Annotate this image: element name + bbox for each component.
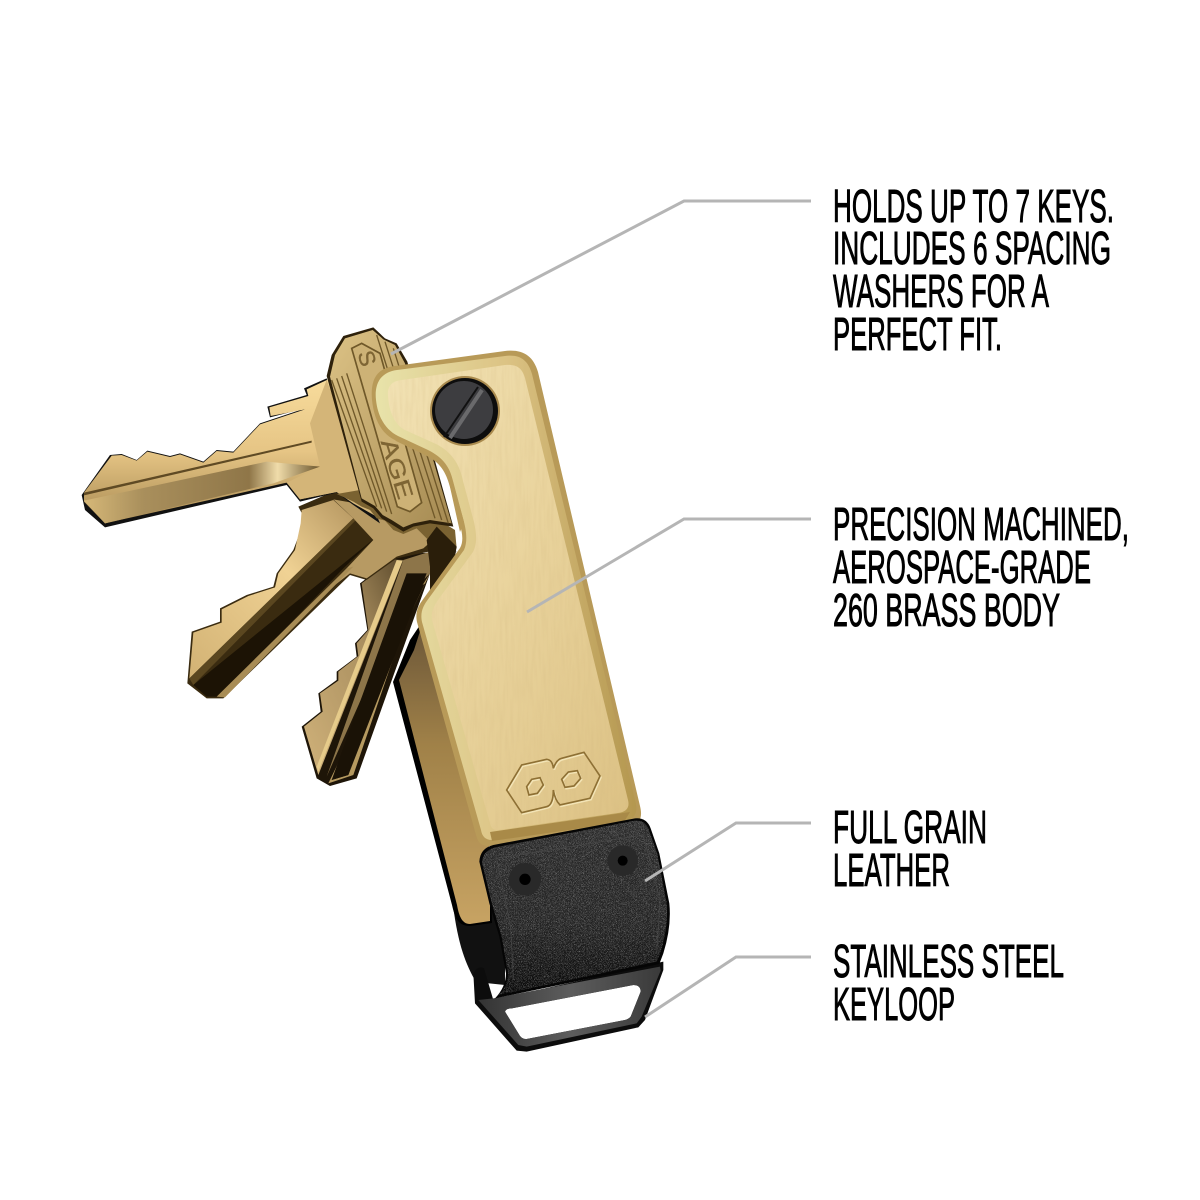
leader line: keys [391, 201, 811, 354]
back plate brass [399, 625, 490, 924]
callout: leather [833, 801, 987, 896]
key one [82, 378, 380, 527]
key two [187, 492, 447, 698]
callout: brass body [833, 498, 1129, 636]
leader line: leather [645, 823, 811, 881]
engraved hex logo [507, 752, 601, 814]
key brand plate [352, 343, 422, 512]
screw [430, 376, 500, 446]
key organizer illustration [82, 327, 670, 1052]
callout: holds up to 7 keys: PERFECT FIT. [833, 308, 1002, 360]
callout: keyloop: KEYLOOP [833, 978, 955, 1030]
right rivet [607, 845, 638, 876]
left rivet [509, 863, 541, 896]
callout: holds up to 7 keys [833, 180, 1114, 360]
callout: keyloop [833, 935, 1064, 1030]
brass body bevel [376, 356, 636, 840]
leader line: body [527, 519, 811, 612]
brass body edge [372, 351, 641, 846]
key brand lettering lower: AGE [376, 436, 419, 502]
callout: leather: FULL GRAIN [833, 801, 987, 853]
leader line: keyloop [645, 957, 811, 1017]
key brand lettering: S [353, 347, 382, 369]
strap behind body [453, 905, 505, 985]
key three [302, 552, 457, 786]
key heads stack [327, 327, 453, 532]
callout: leather: LEATHER [833, 844, 950, 896]
leather stitch outline [497, 835, 660, 980]
stainless steel keyloop [473, 962, 663, 1052]
key head ridges [332, 335, 448, 523]
hook underside shade [380, 424, 464, 532]
dark stack under hook [427, 527, 457, 593]
leather tab [479, 818, 670, 998]
brass body face [388, 365, 629, 830]
lower key stack edges [337, 490, 457, 548]
bottom edge shade [490, 812, 630, 841]
back plate [393, 625, 492, 926]
brass body [372, 351, 641, 846]
keys [82, 327, 457, 786]
